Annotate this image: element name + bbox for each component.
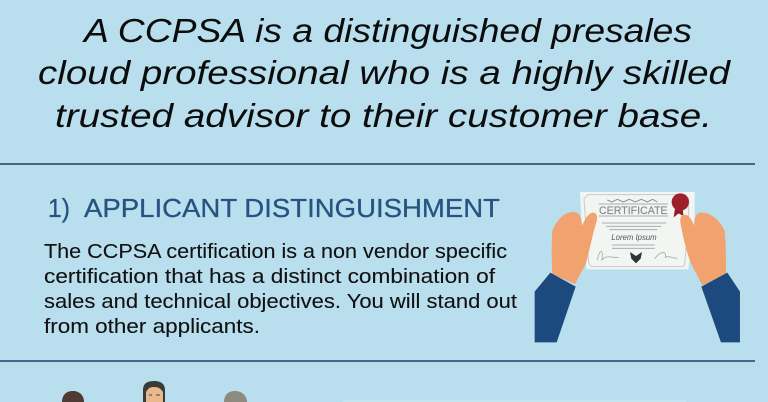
- person right head: [224, 391, 247, 402]
- body text: certification that has a distinct combination of: [44, 266, 495, 288]
- right hand: [680, 213, 726, 285]
- section heading: 1): [48, 193, 70, 223]
- icon: hands holding certificate: [535, 192, 740, 342]
- body text: from other applicants.: [44, 316, 260, 338]
- title: trusted advisor to their customer base.: [55, 97, 712, 134]
- title: cloud professional who is a highly skilled: [38, 54, 732, 91]
- body text: sales and technical objectives. You will stand out: [44, 291, 517, 313]
- person left head: [62, 391, 84, 402]
- body text: The CCPSA certification is a non vendor specific: [44, 241, 507, 263]
- left hand: [552, 212, 597, 284]
- certificate paper: CERTIFICATE: [599, 205, 668, 217]
- body text: [44, 241, 517, 338]
- title: [38, 12, 732, 134]
- wax seal: [672, 193, 689, 217]
- left sleeve: [535, 273, 576, 342]
- certificate paper: [580, 192, 695, 269]
- next section text, cut off: [343, 400, 686, 402]
- person centre head: [143, 381, 165, 402]
- title: A CCPSA is a distinguished presales: [82, 12, 692, 49]
- people illustration: [62, 381, 247, 402]
- section heading: APPLICANT DISTINGUISHMENT: [84, 193, 500, 223]
- certificate paper: Lorem Ipsum: [611, 232, 657, 242]
- right sleeve: [701, 273, 740, 342]
